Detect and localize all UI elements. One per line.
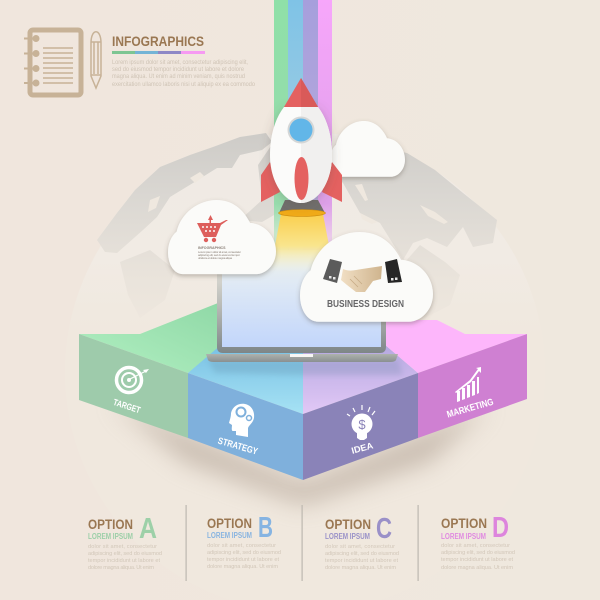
option C: dolore magna aliqua. Ut enim xyxy=(325,565,396,571)
rocket flame xyxy=(270,214,334,272)
world globe xyxy=(65,130,545,600)
label: marketing: MARKETING xyxy=(446,397,495,420)
laptop shadow xyxy=(208,360,403,375)
rocket centre stripe xyxy=(294,157,308,200)
cloud text: infographics xyxy=(198,246,241,260)
option A: OPTION xyxy=(88,517,133,532)
rocket fins xyxy=(261,162,342,202)
cloud text: infographics: adipiscing elit, sed do eiusmod tempor xyxy=(198,253,240,257)
option B: dolor sit amet, consectetur xyxy=(207,543,276,549)
notebook rings xyxy=(24,36,38,86)
option D: dolor sit amet, consectetur xyxy=(441,543,510,549)
option D: dolore magna aliqua. Ut enim xyxy=(441,565,513,571)
option C: dolor sit amet, consectetur xyxy=(325,544,395,550)
cloud: business design xyxy=(300,232,433,322)
cloud label: business design: BUSINESS DESIGN xyxy=(327,298,404,310)
box shadow xyxy=(110,400,490,505)
top: target xyxy=(79,303,225,373)
icon: idea bulb: $ xyxy=(358,417,366,432)
cloud: top right xyxy=(330,121,405,177)
notebook icon xyxy=(24,30,81,95)
option A: A xyxy=(139,513,157,545)
cloud: shopping xyxy=(168,200,276,274)
box top surface xyxy=(79,303,527,414)
option C: adipiscing elit, sed do eiusmod xyxy=(325,551,399,557)
option B xyxy=(207,512,281,570)
rocket xyxy=(261,78,342,216)
rocket nose xyxy=(284,78,318,107)
option C: C xyxy=(376,513,392,545)
pencil icon xyxy=(91,32,101,88)
cloud text: infographics: Lorem ipsum dolor sit amet, consectetur xyxy=(198,250,241,254)
label: target: TARGET xyxy=(112,397,142,415)
header body text: Lorem ipsum dolor sit amet, consectetur adipiscing elit, xyxy=(112,60,248,66)
rocket exhaust ring xyxy=(278,210,326,216)
option B: LOREM IPSUM xyxy=(207,531,252,540)
laptop xyxy=(206,250,398,362)
option A: dolore magna aliqua. Ut enim xyxy=(88,565,154,571)
icon: target xyxy=(116,368,149,392)
option B: OPTION xyxy=(207,516,252,531)
top: idea xyxy=(303,344,418,414)
cloud text: infographics: ut labore et dolore magna aliqua xyxy=(198,256,232,260)
box front: idea xyxy=(303,373,418,480)
top: marketing xyxy=(384,320,527,373)
option D xyxy=(441,512,515,571)
option C: LOREM IPSUM xyxy=(325,532,370,541)
option D: OPTION xyxy=(441,516,487,531)
divider 1 xyxy=(186,505,187,581)
icon: strategy head xyxy=(229,404,254,437)
option B: dolore magna aliqua. Ut enim xyxy=(207,564,278,570)
header body text: magna aliqua. Ut enim ad minim veniam, quis nostrud xyxy=(112,74,245,80)
icon: shopping cart xyxy=(197,215,228,242)
option D: adipiscing elit, sed do eiusmod xyxy=(441,550,515,556)
header title: INFOGRAPHICS xyxy=(112,33,204,49)
rainbow stripes xyxy=(274,0,332,272)
laptop screen xyxy=(217,260,386,353)
option D: tempor incididunt ut labore et xyxy=(441,557,513,563)
option C xyxy=(325,513,399,571)
label: idea: IDEA xyxy=(350,440,375,456)
rocket nozzle xyxy=(279,200,325,213)
box front: marketing xyxy=(418,334,527,438)
top: strategy xyxy=(188,344,303,414)
label: strategy: STRATEGY xyxy=(216,436,259,458)
globe continents xyxy=(97,130,497,318)
cloud text: infographics: INFOGRAPHICS xyxy=(198,246,226,250)
option C: OPTION xyxy=(325,517,371,532)
rocket body xyxy=(270,107,332,203)
icon: handshake xyxy=(323,259,402,292)
option D: LOREM IPSUM xyxy=(441,532,486,541)
header body text: exercitation ullamco laboris nisi ut aliquip ex ea commodo xyxy=(112,82,256,88)
icon: marketing chart xyxy=(455,367,481,402)
header body text: sed do eiusmod tempor incididunt ut labore et dolore xyxy=(112,67,245,73)
header colour bar xyxy=(112,51,205,54)
option C: tempor incididunt ut labore et xyxy=(325,558,398,564)
option A: dolor sit amet, consectetur xyxy=(88,544,157,550)
divider 2 xyxy=(302,505,303,581)
option A xyxy=(88,513,162,571)
option A: LOREM IPSUM xyxy=(88,532,133,541)
option D: D xyxy=(492,512,509,544)
laptop base xyxy=(206,354,398,362)
box front: strategy xyxy=(188,373,303,480)
option B: adipiscing elit, sed do eiusmod xyxy=(207,550,281,556)
globe ocean details xyxy=(148,172,448,224)
option A: adipiscing elit, sed do eiusmod xyxy=(88,551,162,557)
header body text xyxy=(112,60,256,88)
option B: B xyxy=(258,512,273,544)
option A: tempor incididunt ut labore et xyxy=(88,558,160,564)
rocket window xyxy=(288,116,314,144)
option B: tempor incididunt ut labore et xyxy=(207,557,279,563)
box front: target xyxy=(79,334,188,438)
divider 3 xyxy=(418,505,419,581)
